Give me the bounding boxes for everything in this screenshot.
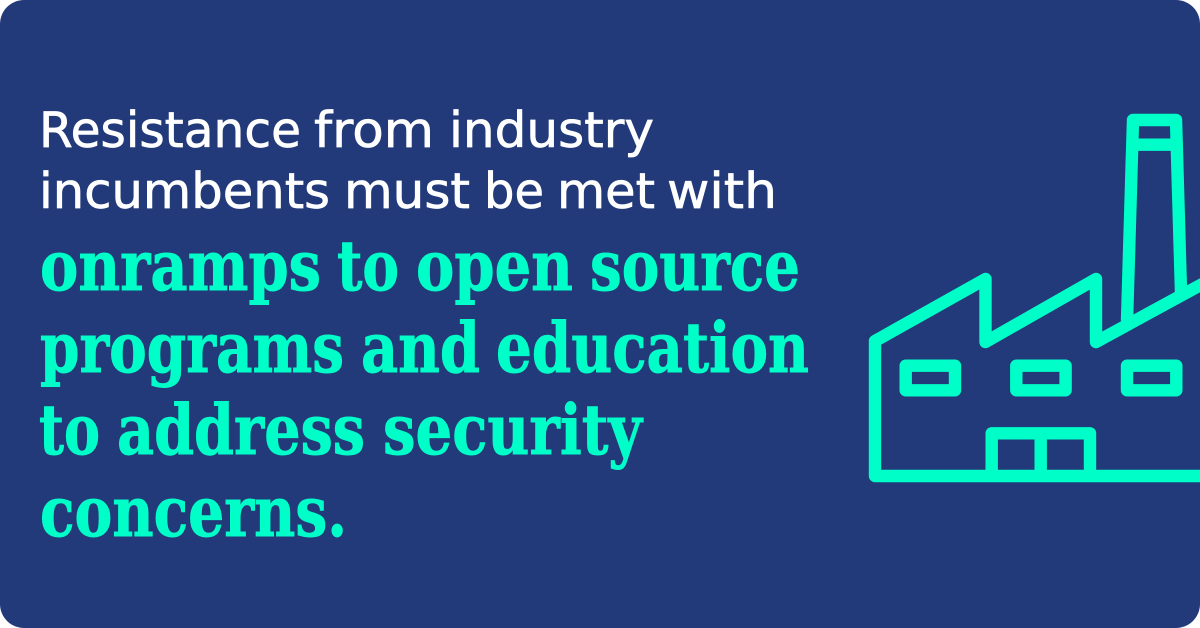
- icon: factory: [875, 120, 1200, 476]
- intro text: met: [557, 163, 655, 220]
- highlighted text: programs: [40, 308, 344, 389]
- highlighted text: to: [39, 390, 100, 471]
- highlighted text: education: [496, 308, 809, 389]
- highlighted text: source: [590, 226, 800, 307]
- highlighted text: open: [416, 226, 573, 307]
- highlighted text: onramps: [40, 226, 321, 307]
- intro text: [39, 102, 777, 220]
- intro text: from: [314, 102, 434, 159]
- highlighted text: and: [361, 308, 480, 389]
- intro text: incumbents: [39, 163, 330, 220]
- intro text: Resistance: [39, 102, 301, 159]
- highlighted text: address: [117, 390, 365, 471]
- intro text: be: [484, 163, 544, 220]
- highlighted text: [39, 226, 809, 553]
- highlighted text: security: [383, 390, 644, 471]
- intro text: must: [344, 163, 470, 220]
- highlighted text: concerns.: [40, 472, 347, 553]
- intro text: industry: [449, 102, 654, 159]
- highlighted text: to: [337, 226, 399, 307]
- intro text: with: [667, 163, 777, 220]
